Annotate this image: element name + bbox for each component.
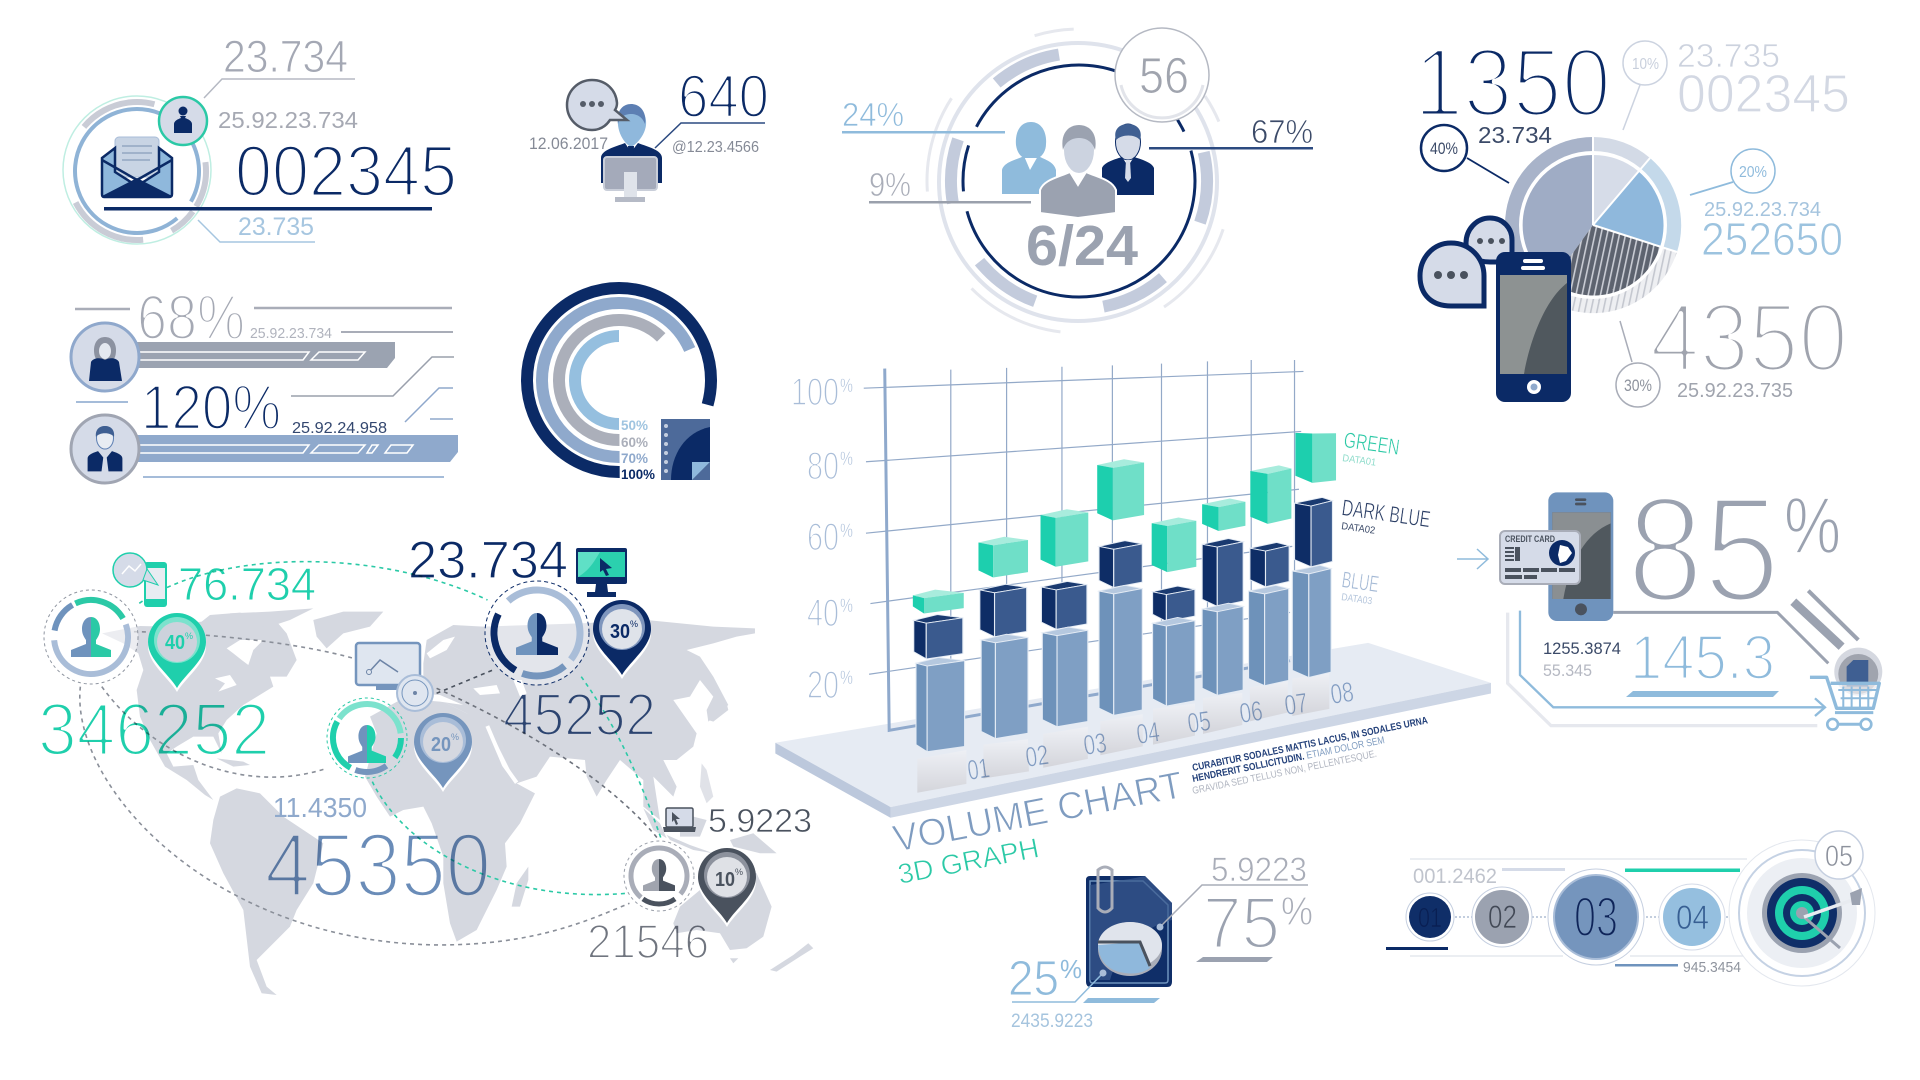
user node: south-east [620,837,698,915]
pin: 10%: % [735,867,743,877]
number: 23.734: 23.734 [1478,122,1552,148]
user node: east [476,572,598,694]
icon: phone [1496,252,1571,402]
panel: world map [38,531,813,995]
number: 25.92.24.958: 25.92.24.958 [292,420,387,437]
step 04: 04 [1676,899,1709,937]
pin: 20%: % [451,732,459,742]
leader: 24% [842,131,1005,134]
number: 145.3: 145.3 [1630,623,1775,693]
number: 21546: 21546 [587,916,709,969]
stacked bars [913,433,1336,752]
panel: document stats [1008,851,1313,1032]
badge: 56 [1115,28,1209,122]
number: 002345: 002345 [235,132,457,212]
x axis labels: 04 [1135,716,1162,750]
y axis labels: 20 [807,664,839,707]
flow lines [1508,611,1825,726]
leader [1156,885,1308,930]
rules [1410,859,1747,956]
pin: 20% [414,713,472,792]
y axis labels: 60 [807,516,839,559]
bar [1083,998,1160,1003]
badge: 40% [1421,125,1509,183]
step 05: target: 05 [1825,840,1853,873]
panel: steps [1386,831,1875,986]
badge: 20% [1690,149,1775,195]
grid [864,360,1303,730]
connectors [1455,916,1765,918]
y axis labels [791,371,853,707]
badge: 56: 56 [1139,47,1189,104]
number: 24%: 24% [842,96,904,133]
pin: 40% [148,613,206,692]
rings [887,0,1271,373]
number: 76.734: 76.734 [178,558,316,610]
number: 25: 25 [1008,952,1059,1006]
bar 01 [913,590,965,752]
icon: credit card [1500,531,1580,584]
email rings [50,84,224,258]
avatar badge [159,97,207,145]
arc: 60 [559,320,679,440]
pin: 10%: 10 [715,869,735,891]
pin: 10% [698,848,756,927]
title: volume chart: VOLUME CHART [890,764,1186,861]
number: 85: 85 [1627,465,1780,633]
number: 4350: 4350 [1650,283,1848,392]
number: 11.4350: 11.4350 [273,792,367,823]
number: 45252: 45252 [503,682,656,748]
label: 50%: 50% [621,417,649,433]
number: 346252: 346252 [38,688,270,771]
number: 5.9223: 5.9223 [1211,851,1307,889]
pin: 30%: % [630,619,638,629]
step 02 [1472,887,1532,947]
legend: green: DATA01 [1342,453,1377,469]
x axis labels: 01 [966,752,992,786]
leader: 67% [1149,147,1313,150]
icon: shopping cart [1810,648,1882,730]
underline [104,207,432,210]
panel: 640 agent [529,63,769,202]
panel: radial progress [527,288,711,482]
dashed routes [80,562,662,945]
icon: document with pie [1086,867,1172,987]
number: 23.734: 23.734 [223,31,348,82]
pin: 30% [593,600,651,679]
step 03 [1548,869,1644,965]
number: 1255.3874: 1255.3874 [1543,639,1621,658]
y axis labels: % [840,596,853,617]
label: 70%: 70% [621,450,649,466]
icon: chat bubbles [1420,218,1512,306]
icon: woman [1002,122,1056,194]
icon: analytics monitor [356,643,420,690]
accent bars [1386,868,1740,966]
icon: envelope [102,137,172,197]
number: 252650: 252650 [1701,213,1843,265]
bar 07 [1249,465,1291,686]
legend: blue: BLUE [1340,566,1381,597]
label: 100%: 100% [621,466,656,482]
pin: 20%: 20 [431,734,451,756]
panel: 3D volume chart [775,360,1491,890]
bar 08 [1292,433,1336,677]
leader: bottom [198,220,315,242]
percent: % [1281,890,1313,934]
icon: man center [1040,125,1116,218]
icon: document corner [661,419,710,480]
icon: man right [1102,124,1154,195]
bar 04 [1097,459,1144,715]
legend: dark blue: DARK BLUE [1340,494,1432,532]
arc: 100 [527,288,711,472]
number: 23.735: 23.735 [238,213,314,241]
number: 001.2462: 001.2462 [1413,865,1497,888]
x axis labels: 03 [1082,727,1109,761]
number: 9%: 9% [869,166,911,203]
subtitle: 3D graph: 3D GRAPH [895,832,1042,890]
pin: 40%: % [185,631,193,641]
icon: phone and bubble [113,553,167,607]
y axis labels: 100 [791,371,839,414]
x axis labels: 02 [1024,739,1051,773]
bar [1196,957,1273,962]
panel: pie and phone [1414,28,1850,407]
panel: mobile payment [1457,465,1882,730]
badge: 20%: 20% [1739,164,1767,181]
bar [1626,691,1779,697]
legend: dark blue [1340,494,1432,537]
icon: monitor cursor [576,548,627,597]
rule [341,331,453,333]
platform [775,643,1491,818]
leader: 9% [869,201,1031,204]
number: 55.345: 55.345 [1543,661,1592,680]
arc: 50 [575,336,663,424]
bar 05 [1152,517,1196,706]
icon: phone [1548,492,1613,621]
y axis labels: % [840,521,853,542]
icon: speech bubble [567,80,627,130]
legend: blue: DATA03 [1341,592,1373,607]
label: 60%: 60% [621,434,649,450]
icon: laptop [663,808,696,832]
x axis labels: 07 [1283,687,1310,721]
pie chart [1505,137,1681,313]
number: 23.735: 23.735 [1677,37,1780,74]
rule [76,401,128,403]
number: 945.3454: 945.3454 [1683,959,1741,976]
badge: 30%: 30% [1624,376,1652,395]
number: 120%: 120% [141,373,281,443]
number: 5.9223: 5.9223 [708,802,812,839]
badge: 40%: 40% [1430,139,1458,158]
legend: green: GREEN [1342,427,1401,460]
y axis labels: % [840,376,853,397]
chart caption [1191,715,1429,797]
panel: progress bars [71,283,458,483]
number: 002345: 002345 [1677,64,1850,124]
world map: americas [102,608,383,995]
step 05: target [1729,831,1875,986]
user node: centre [320,691,414,785]
y axis labels: % [840,449,853,470]
step 02: 02 [1488,899,1517,935]
panel: people [842,0,1313,373]
number: 2435.9223: 2435.9223 [1011,1011,1093,1032]
percent sign: % [1784,481,1841,570]
badge: 10%: 10% [1632,56,1659,73]
arrow [1457,549,1488,569]
badge: 10% [1623,41,1667,130]
number: 1350: 1350 [1414,28,1611,137]
y axis labels: 80 [807,445,839,488]
number: 45350: 45350 [265,816,491,916]
pin: 30%: 30 [610,621,630,643]
number: 25.92.23.734: 25.92.23.734 [218,107,358,133]
step 01 [1406,893,1454,941]
number: 6/24: 6/24 [1026,214,1138,278]
legend: green [1342,427,1401,469]
step 03: 03 [1574,885,1618,948]
number: 25.92.23.735: 25.92.23.735 [1677,380,1793,402]
percent: % [1060,954,1082,984]
number: 25.92.23.734: 25.92.23.734 [250,325,332,342]
leader [1012,970,1106,1002]
icon: dial [397,675,433,711]
number: 640: 640 [678,63,769,130]
step 04 [1659,884,1725,950]
rule [143,476,444,478]
leader [655,123,765,148]
icon: agent at monitor [601,104,662,202]
user node: west [42,588,140,686]
rules [75,308,452,309]
chart caption: GRAVIDA SED TELLUS NON, PELLENTESQUE. [1191,749,1378,797]
badge: 30% [1616,321,1660,407]
number: 23.734: 23.734 [408,531,568,590]
pin: 40%: 40 [165,632,185,654]
handle: @12.23.4566 [672,139,759,156]
avatar: man [71,415,139,483]
x axis labels [966,676,1356,786]
icon: credit card: CREDIT CARD [1505,534,1555,545]
x axis labels: 06 [1238,695,1265,729]
y axis labels: 40 [807,592,839,635]
bar: 120 [135,435,458,462]
x axis labels: 05 [1186,705,1213,739]
leader: top [204,79,355,98]
number: 75: 75 [1203,883,1280,964]
chart caption: HENDRERIT SOLLICITUDIN. ETIAM DOLOR SEM [1191,735,1386,785]
leaders [291,357,454,422]
number: 25.92.23.734: 25.92.23.734 [1704,199,1821,221]
y axis labels: % [840,668,853,689]
number: 67%: 67% [1251,113,1313,150]
chart caption: CURABITUR SODALES MATTIS LACUS, IN SODALES URNA [1191,715,1429,774]
bar 03 [1041,509,1088,727]
gray connector [1613,591,1858,663]
bar 02 [978,537,1028,739]
world map: eastern hemisphere [365,620,813,972]
number: 68%: 68% [137,283,245,353]
panel: email stats [50,31,457,258]
bar: 68 [135,342,395,368]
step 01: 01 [1418,902,1442,933]
bar 06 [1202,499,1245,695]
date: 12.06.2017 [529,134,608,153]
x axis labels: 08 [1329,676,1356,710]
legend: dark blue: DATA02 [1341,521,1376,537]
arc: 70 [542,303,696,457]
legend: blue [1340,566,1381,607]
bar reflections [917,673,1329,793]
avatar: woman [71,323,139,391]
